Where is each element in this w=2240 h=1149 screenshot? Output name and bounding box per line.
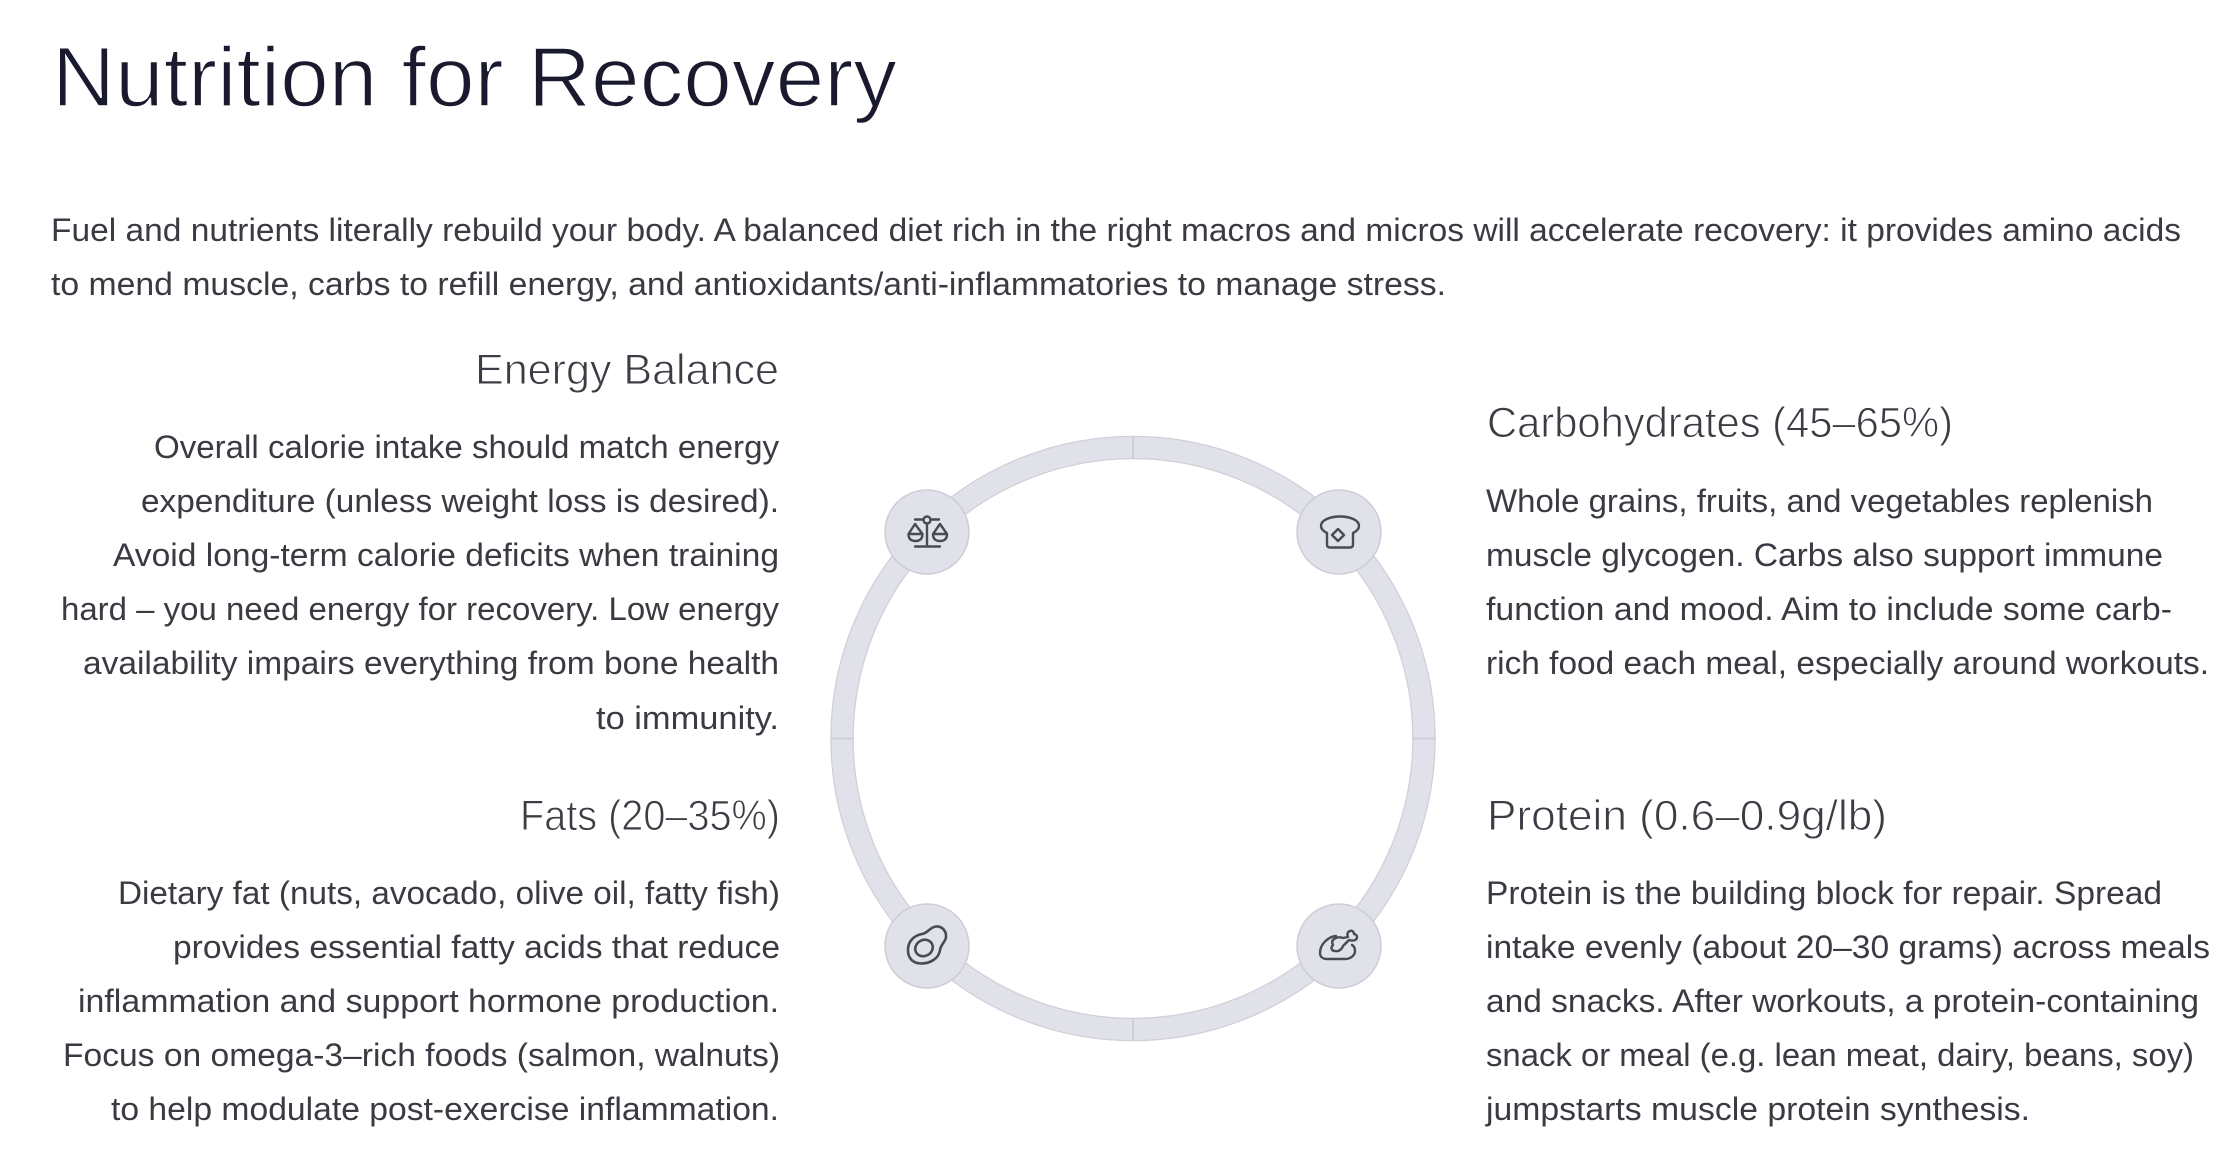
heading: carbohydrates: Carbohydrates (45–65%) (1487, 399, 1953, 447)
heading: fats: Fats (20–35%) (520, 792, 780, 840)
text: energy balance body: to immunity. (596, 700, 779, 736)
text: carbohydrates body: Whole grains, fruits, and vegetables replenish (1486, 483, 2153, 519)
text: protein body: snack or meal (e.g. lean meat, dairy, beans, soy) (1486, 1037, 2194, 1073)
text: fats body: inflammation and support hormone production. (78, 983, 779, 1019)
text: energy balance body: Avoid long-term calorie deficits when training (113, 537, 779, 573)
ring diagram (831, 436, 1435, 1041)
text: protein body: Protein is the building block for repair. Spread (1486, 875, 2162, 911)
node: avocado (885, 904, 969, 988)
panel: fats (63, 792, 780, 1127)
heading: protein: Protein (0.6–0.9g/lb) (1487, 792, 1887, 840)
intro paragraph: Fuel and nutrients literally rebuild your body. A balanced diet rich in the right macros and micros will accelerate recovery: it provides amino acids (51, 212, 2181, 248)
text: energy balance body: Overall calorie intake should match energy (154, 429, 779, 465)
text: energy balance body: hard – you need energy for recovery. Low energy (61, 591, 779, 627)
ring (831, 436, 1435, 1041)
text: fats body (63, 875, 780, 1127)
icon: turkey (1320, 931, 1357, 959)
text: fats body: Focus on omega-3–rich foods (salmon, walnuts) (63, 1037, 780, 1073)
text: fats body: Dietary fat (nuts, avocado, olive oil, fatty fish) (118, 875, 780, 911)
intro paragraph: to mend muscle, carbs to refill energy, and antioxidants/anti-inflammatories to manage stress. (51, 266, 1446, 302)
icon: toast (1321, 516, 1359, 548)
intro paragraph (51, 212, 2181, 302)
icon: avocado (908, 926, 946, 964)
text: energy balance body (61, 429, 779, 736)
text: energy balance body: expenditure (unless weight loss is desired). (141, 483, 779, 519)
panel: carbohydrates (1486, 399, 2209, 681)
text: energy balance body: availability impairs everything from bone health (83, 645, 779, 681)
icon: balance scale (908, 516, 947, 546)
text: protein body: and snacks. After workouts, a protein-containing (1486, 983, 2199, 1019)
node: turkey (1297, 904, 1381, 988)
node: toast (1297, 490, 1381, 574)
text: fats body: to help modulate post-exercise inflammation. (111, 1091, 779, 1127)
node: balance scale (885, 490, 969, 574)
panel: protein (1485, 792, 2210, 1127)
heading: energy balance: Energy Balance (475, 346, 779, 394)
panel: energy balance (61, 346, 779, 736)
text: fats body: provides essential fatty acids that reduce (173, 929, 780, 965)
text: carbohydrates body: rich food each meal, especially around workouts. (1486, 645, 2209, 681)
text: protein body: intake evenly (about 20–30 grams) across meals (1486, 929, 2210, 965)
text: carbohydrates body (1486, 483, 2209, 681)
title: Nutrition for Recovery (52, 30, 897, 124)
text: protein body (1485, 875, 2210, 1127)
text: carbohydrates body: muscle glycogen. Carbs also support immune (1486, 537, 2163, 573)
text: carbohydrates body: function and mood. Aim to include some carb- (1486, 591, 2172, 627)
text: protein body: jumpstarts muscle protein synthesis. (1485, 1091, 2030, 1127)
